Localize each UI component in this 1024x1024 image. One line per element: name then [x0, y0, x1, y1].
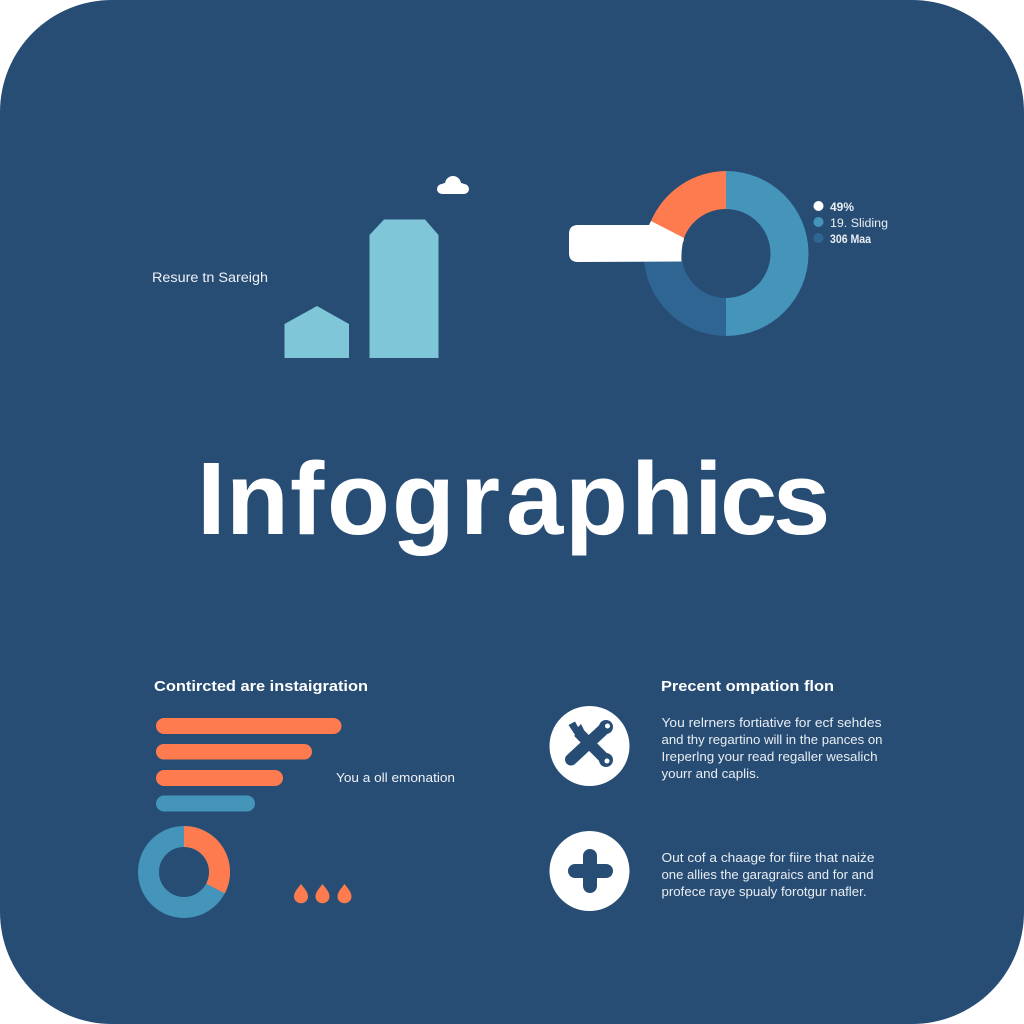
icon: cloud	[437, 176, 469, 194]
text block: first paragraph: You relrners fortiative for ecf sehdes	[662, 715, 882, 730]
legend: 19. Sliding	[830, 218, 888, 230]
donut chart: main	[569, 171, 808, 336]
legend: 306 Maa	[830, 234, 872, 246]
bar chart label: You a oll emonation	[336, 770, 455, 785]
bar chart: horizontal bars	[156, 718, 342, 812]
legend	[814, 201, 888, 246]
text block: first paragraph	[662, 715, 882, 781]
text block: first paragraph: Ireperlng your read regaller wesalich	[662, 749, 878, 764]
icon: three drops	[294, 884, 352, 903]
donut chart: small	[148, 836, 220, 908]
icon: plus	[550, 831, 630, 911]
text block: first paragraph: and thy regartino will in the pances on	[662, 732, 882, 747]
text block: second paragraph: Out cof a chaage for fiire that naiże	[662, 850, 874, 865]
text block: second paragraph: one allies the garagraics and for and	[662, 867, 874, 882]
text block: first paragraph: yourr and caplis.	[662, 766, 760, 781]
heading: right section: Precent ompation flon	[661, 678, 834, 695]
text block: second paragraph: profece raye spualy forotgur nafler.	[662, 884, 866, 899]
white callout bar	[569, 221, 684, 262]
heading: left section: Contircted are instaigration	[154, 678, 368, 695]
title: Infographics	[197, 441, 830, 556]
icon: crossed tools	[550, 706, 630, 786]
chart label: Resure tn Sareigh	[152, 270, 268, 285]
legend: 49%	[830, 202, 854, 214]
bar chart: house-shaped bars	[284, 220, 438, 358]
text block: second paragraph	[662, 850, 874, 899]
